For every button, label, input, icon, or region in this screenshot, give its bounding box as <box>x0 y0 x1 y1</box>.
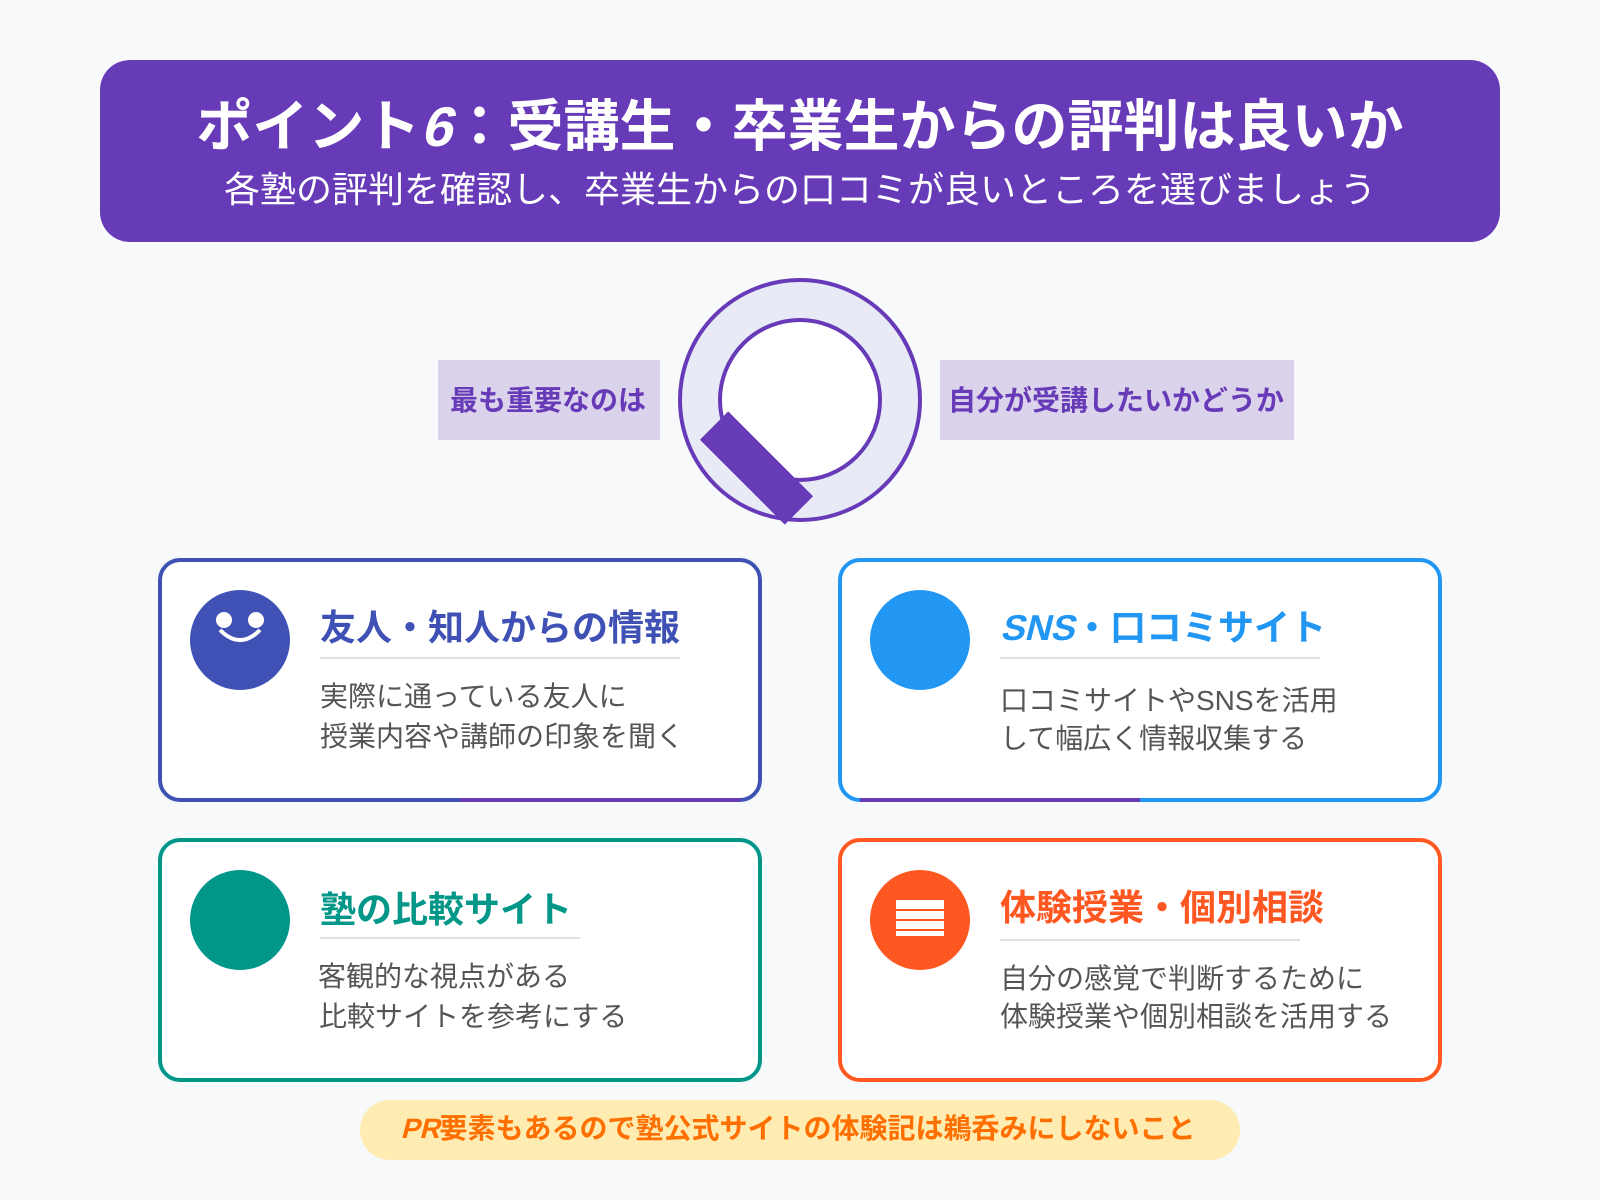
header banner <box>100 60 1500 242</box>
description: 比較サイトを参考にする <box>319 1001 627 1032</box>
icon: magnifying glass <box>680 280 920 525</box>
heading: 友人・知人からの情報 <box>320 607 680 648</box>
panel: trial lessons and consultation <box>840 840 1440 1080</box>
icon: document lines <box>870 870 970 970</box>
description: 実際に通っている友人に <box>320 681 627 712</box>
description: して幅広く情報収集する <box>1000 723 1307 754</box>
heading: ・口コミサイト <box>1074 607 1326 648</box>
icon: teal circle <box>190 870 290 970</box>
description: 体験授業や個別相談を活用する <box>1000 1001 1392 1032</box>
callout: warning pill: 要素もあるので塾公式サイトの体験記は鵜呑みにしないこと <box>440 1113 1196 1144</box>
panel: friends and acquaintances <box>160 560 760 802</box>
description: 口コミサイトやSNSを活用 <box>1000 685 1338 716</box>
description: 授業内容や講師の印象を聞く <box>320 721 684 752</box>
callout: warning pill: PR <box>399 1113 446 1145</box>
heading: SNS <box>998 608 1082 648</box>
icon: blue circle <box>870 590 970 690</box>
description: 自分の感覚で判断するために <box>1000 963 1364 994</box>
subtitle: 各塾の評判を確認し、卒業生からの口コミが良いところを選びましょう <box>224 169 1376 210</box>
heading: 体験授業・個別相談 <box>1000 887 1324 928</box>
panel: comparison sites <box>160 840 760 1080</box>
callout: warning pill <box>360 1100 1240 1160</box>
title: ポイント <box>196 95 420 158</box>
title: ：受講生・卒業生からの評判は良いか <box>452 95 1404 158</box>
label: right of magnifier <box>940 360 1294 440</box>
panel: SNS and review sites <box>840 560 1440 802</box>
label: left of magnifier <box>438 360 660 440</box>
title: 6 <box>417 97 464 159</box>
icon: smiley face <box>190 590 290 690</box>
heading: 塾の比較サイト <box>320 889 572 930</box>
label: left of magnifier: 最も重要なのは <box>450 385 646 416</box>
label: right of magnifier: 自分が受講したいかどうか <box>948 384 1284 416</box>
description: 客観的な視点がある <box>318 961 570 992</box>
